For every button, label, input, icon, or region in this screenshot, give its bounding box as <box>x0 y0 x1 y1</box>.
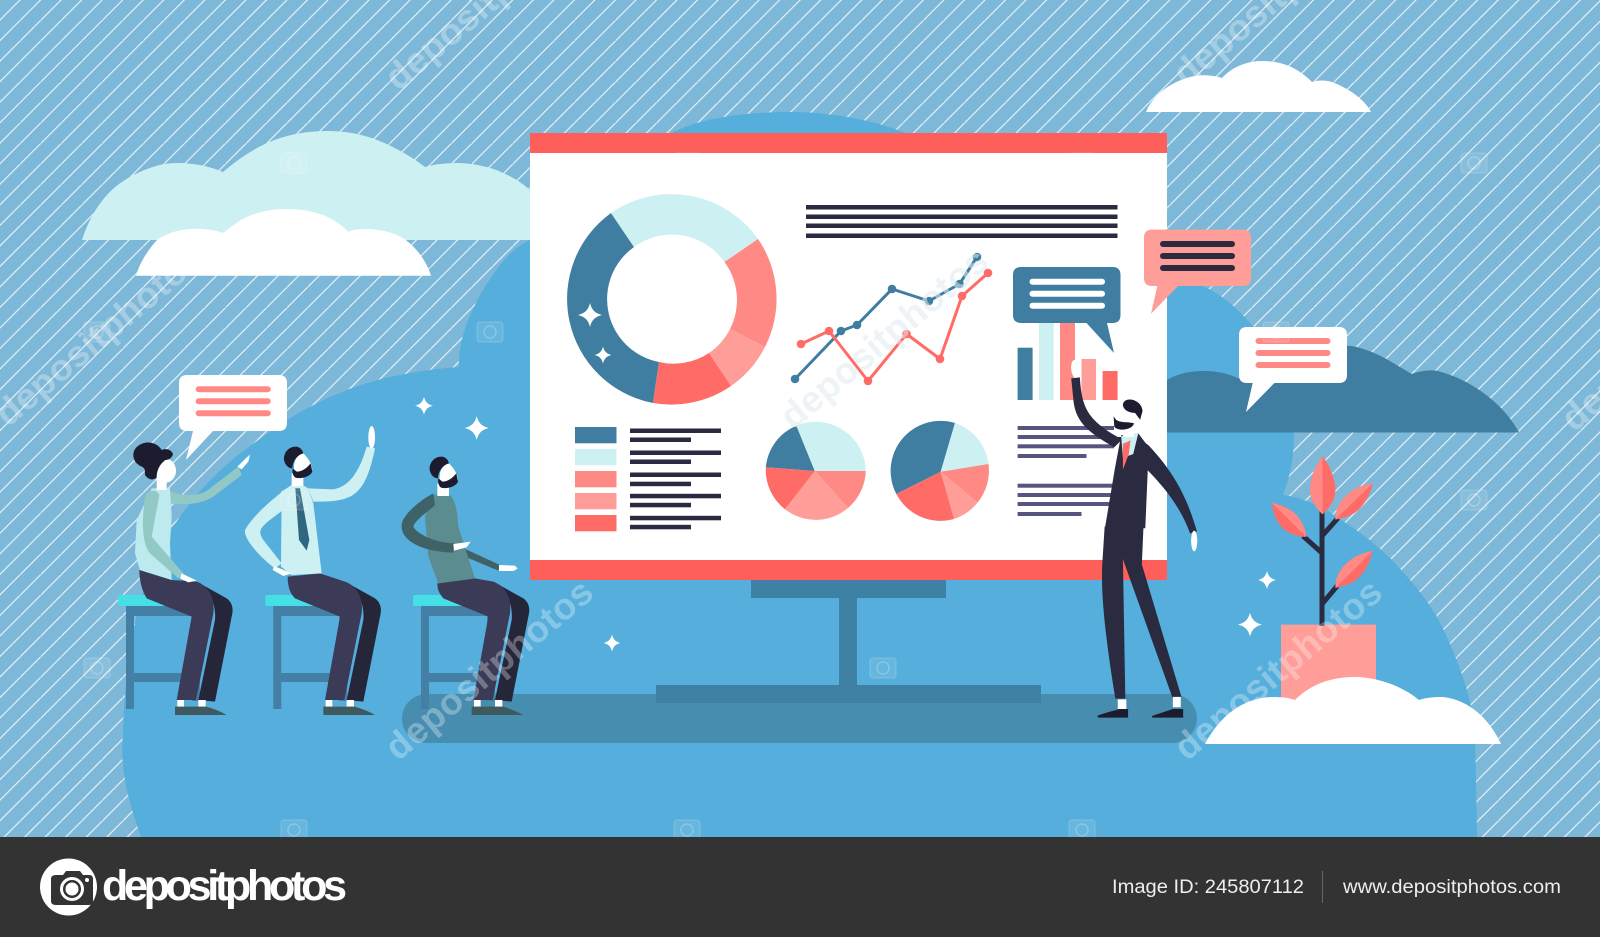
pot <box>1281 625 1376 701</box>
footer logo icon <box>40 858 97 916</box>
presentation board <box>530 133 1167 580</box>
person 1: woman <box>133 443 250 715</box>
legend <box>575 427 721 531</box>
white speech bubble right <box>1239 327 1347 412</box>
person 2: man with tie <box>245 426 381 715</box>
pie chart 2 <box>891 421 989 521</box>
cloud: white left <box>136 209 431 276</box>
donut chart <box>567 194 777 405</box>
stools <box>118 595 495 709</box>
screen stand <box>656 580 1041 703</box>
white speech bubble left <box>179 375 287 460</box>
speech bubble on board <box>1013 267 1120 353</box>
presenter <box>1070 359 1197 718</box>
cloud: dark right <box>1167 346 1519 432</box>
heading text lines <box>806 205 1118 238</box>
bar chart <box>1018 323 1118 400</box>
leaves <box>1272 456 1373 588</box>
pink speech bubble <box>1144 230 1251 314</box>
cloud: light left <box>82 131 530 240</box>
blue background blob <box>122 112 1477 837</box>
footer bar <box>0 837 1600 937</box>
line chart <box>791 253 992 385</box>
right text lines <box>1018 426 1114 516</box>
stem <box>1303 510 1338 626</box>
plant <box>1272 456 1376 701</box>
cloud: white top right <box>1146 61 1371 112</box>
person 3: man in green <box>402 457 529 715</box>
sparkles <box>415 397 1276 652</box>
website url: www.depositphotos.com <box>1342 877 1561 898</box>
watermarks: depositphotos <box>772 240 996 437</box>
footer logo wordmark: depositphotos <box>102 862 347 910</box>
watermarks: depositphotos <box>1166 571 1390 768</box>
watermarks: depositphotos <box>377 571 601 768</box>
pie chart 1 <box>766 422 866 520</box>
floor shadow <box>402 694 1197 743</box>
image id: Image ID: 245807112 <box>1112 877 1304 898</box>
cloud: white bottom right <box>1205 677 1501 744</box>
